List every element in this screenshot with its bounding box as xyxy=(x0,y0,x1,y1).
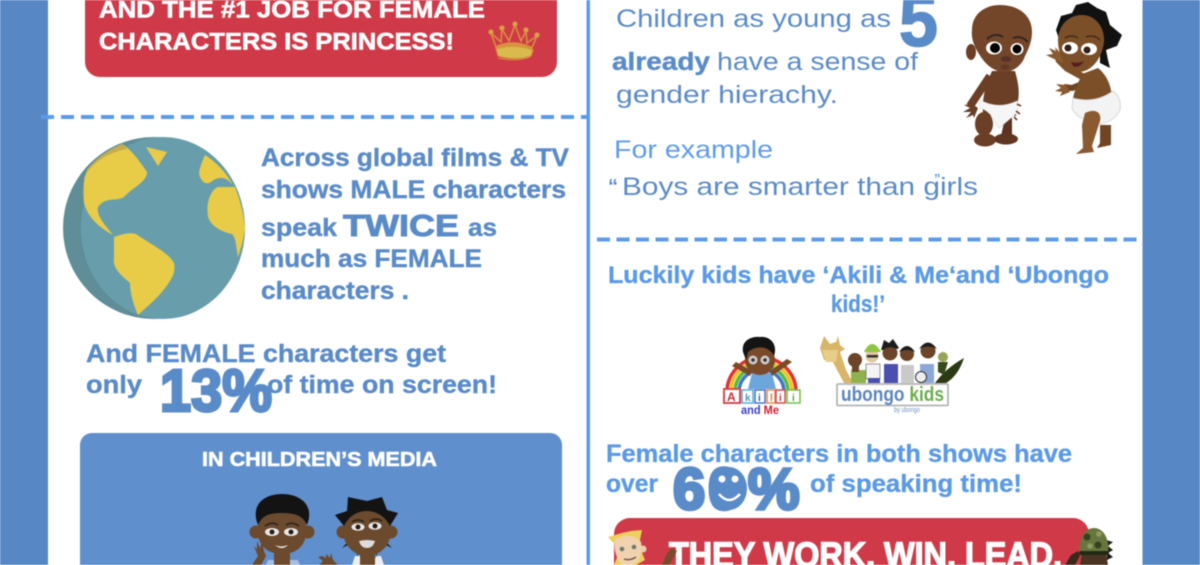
text: speaking time: of speaking time! xyxy=(810,470,1022,498)
logo: akili and me: i xyxy=(758,393,761,404)
text: global films statistic: shows MALE characters xyxy=(261,176,566,204)
logo: ubongo kids xyxy=(820,336,964,414)
text: for example quote: Boys are smarter than girls xyxy=(622,173,978,201)
logo: akili and me: i xyxy=(779,393,782,404)
text: for example quote xyxy=(608,136,978,201)
text: for example quote: ” xyxy=(934,171,940,186)
text: global films statistic: Across global films & TV xyxy=(261,144,569,172)
character: boy xyxy=(250,494,314,565)
character: soldier xyxy=(1065,528,1113,565)
text: gender hierarchy: already xyxy=(612,48,710,76)
text: female screen time: only xyxy=(86,371,142,399)
text: gender hierarchy xyxy=(612,0,938,109)
logo: akili and me xyxy=(724,337,800,417)
text: female screen time: And FEMALE characters get xyxy=(86,340,447,368)
logo: akili and me: i xyxy=(792,393,795,404)
text: for example quote: “ xyxy=(608,176,618,198)
character: girl xyxy=(318,497,398,565)
icon: crown xyxy=(489,22,539,60)
text: global films statistic: speak xyxy=(261,214,337,242)
text: female screen time: of time on screen! xyxy=(267,371,497,399)
text: speaking time: over xyxy=(606,470,658,498)
text: luckily kids: Luckily kids have ‘Akili & Me‘and ‘Ubongo xyxy=(608,262,1109,289)
panel: princess callout xyxy=(85,0,557,77)
text: speaking time: Female characters in both shows have xyxy=(606,440,1072,468)
text: global films statistic: characters . xyxy=(261,277,409,305)
icon: globe xyxy=(63,137,245,319)
logo: akili and me: k xyxy=(745,393,751,404)
logo: ubongo kids: ubongo kids xyxy=(841,384,944,406)
logo: akili and me: and Me xyxy=(741,403,779,417)
logo: ubongo kids: by ubongo xyxy=(894,407,920,414)
text: female screen time: 13% xyxy=(160,358,272,424)
text: gender hierarchy: have a sense of xyxy=(717,48,918,76)
big number: 60 percent with smiley: 60% xyxy=(673,457,800,522)
text: global films statistic: TWICE xyxy=(343,208,459,243)
text: luckily kids xyxy=(608,262,1109,318)
text: luckily kids: kids!’ xyxy=(831,291,885,318)
panel: they work callout xyxy=(608,518,1113,565)
princess callout text: CHARACTERS IS PRINCESS! xyxy=(99,28,454,56)
icon: baby boy xyxy=(963,5,1032,146)
princess callout text xyxy=(99,0,485,56)
icon: brown figure xyxy=(662,548,677,565)
logo: akili and me: A xyxy=(727,390,736,404)
left blue margin xyxy=(0,0,48,565)
character: blonde woman xyxy=(608,530,646,565)
text: speaking time xyxy=(606,440,1072,522)
logo: akili and me: l xyxy=(770,393,773,404)
text: for example quote: For example xyxy=(614,136,773,164)
text: global films statistic xyxy=(261,144,569,305)
text: global films statistic: much as FEMALE xyxy=(261,245,482,273)
text: gender hierarchy: Children as young as xyxy=(616,5,891,33)
panel heading: IN CHILDREN’S MEDIA xyxy=(202,449,437,471)
text: female screen time xyxy=(86,340,497,424)
text: gender hierarchy: gender hierachy. xyxy=(616,81,838,109)
right blue margin xyxy=(1142,0,1200,565)
icon: baby girl xyxy=(1046,2,1122,154)
panel: in children's media xyxy=(80,433,562,565)
text: global films statistic: as xyxy=(468,214,497,242)
